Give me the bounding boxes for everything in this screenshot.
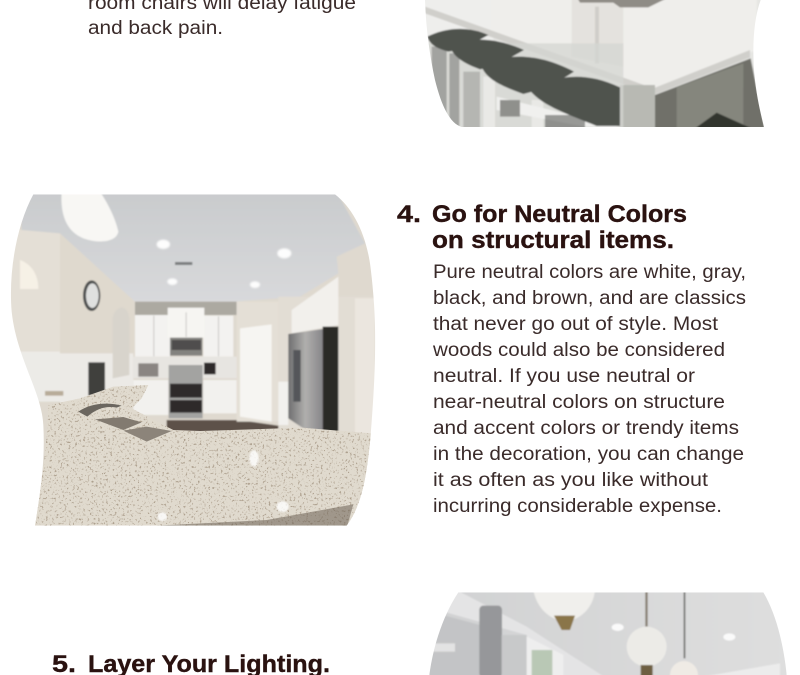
body text: tip 4: it as often as you like without	[433, 470, 709, 491]
heading: tip 4: on structural items.	[432, 227, 674, 254]
sink	[95, 417, 142, 430]
stove and lower cabinets	[133, 380, 237, 415]
body text: tip 4: in the decoration, you can change	[433, 444, 744, 465]
body text: tip 4: neutral. If you use neutral or	[433, 366, 696, 387]
fridge	[288, 329, 323, 435]
body text: tip 4: that never go out of style. Most	[433, 314, 719, 335]
body text: end of tip 3	[88, 0, 356, 39]
body text: tip 4: Pure neutral colors are white, gray,	[433, 262, 746, 283]
left far wall	[7, 228, 60, 398]
door and right wall	[236, 303, 252, 423]
upper cabinets	[135, 315, 233, 357]
body text: tip 4: incurring considerable expense.	[433, 496, 722, 517]
body text: tip 4: and accent colors or trendy items	[433, 418, 739, 439]
body text: tip 4	[432, 262, 746, 517]
back wall	[135, 302, 237, 315]
clock	[83, 280, 100, 311]
photo: kitchen island with bar stools	[420, 0, 767, 130]
heading: tip 4: Go for Neutral Colors	[432, 201, 687, 228]
photo: pendant lights on ceiling	[427, 590, 790, 675]
blender	[88, 362, 105, 396]
archway	[112, 352, 130, 378]
body text: tip 4: woods could also be considered	[432, 340, 725, 361]
body text: tip 4: black, and brown, and are classics	[433, 288, 746, 309]
ceiling	[20, 192, 365, 302]
heading: tip 4: 4.	[397, 201, 421, 228]
heading: tip 4	[397, 201, 687, 254]
body text: tip 4: near-neutral colors on structure	[433, 392, 725, 413]
stools	[427, 29, 620, 126]
body text: end of tip 3: and back pain.	[88, 18, 223, 39]
photo: kitchen with granite counter	[7, 192, 380, 528]
floor	[166, 419, 280, 431]
granite counter	[30, 382, 377, 528]
